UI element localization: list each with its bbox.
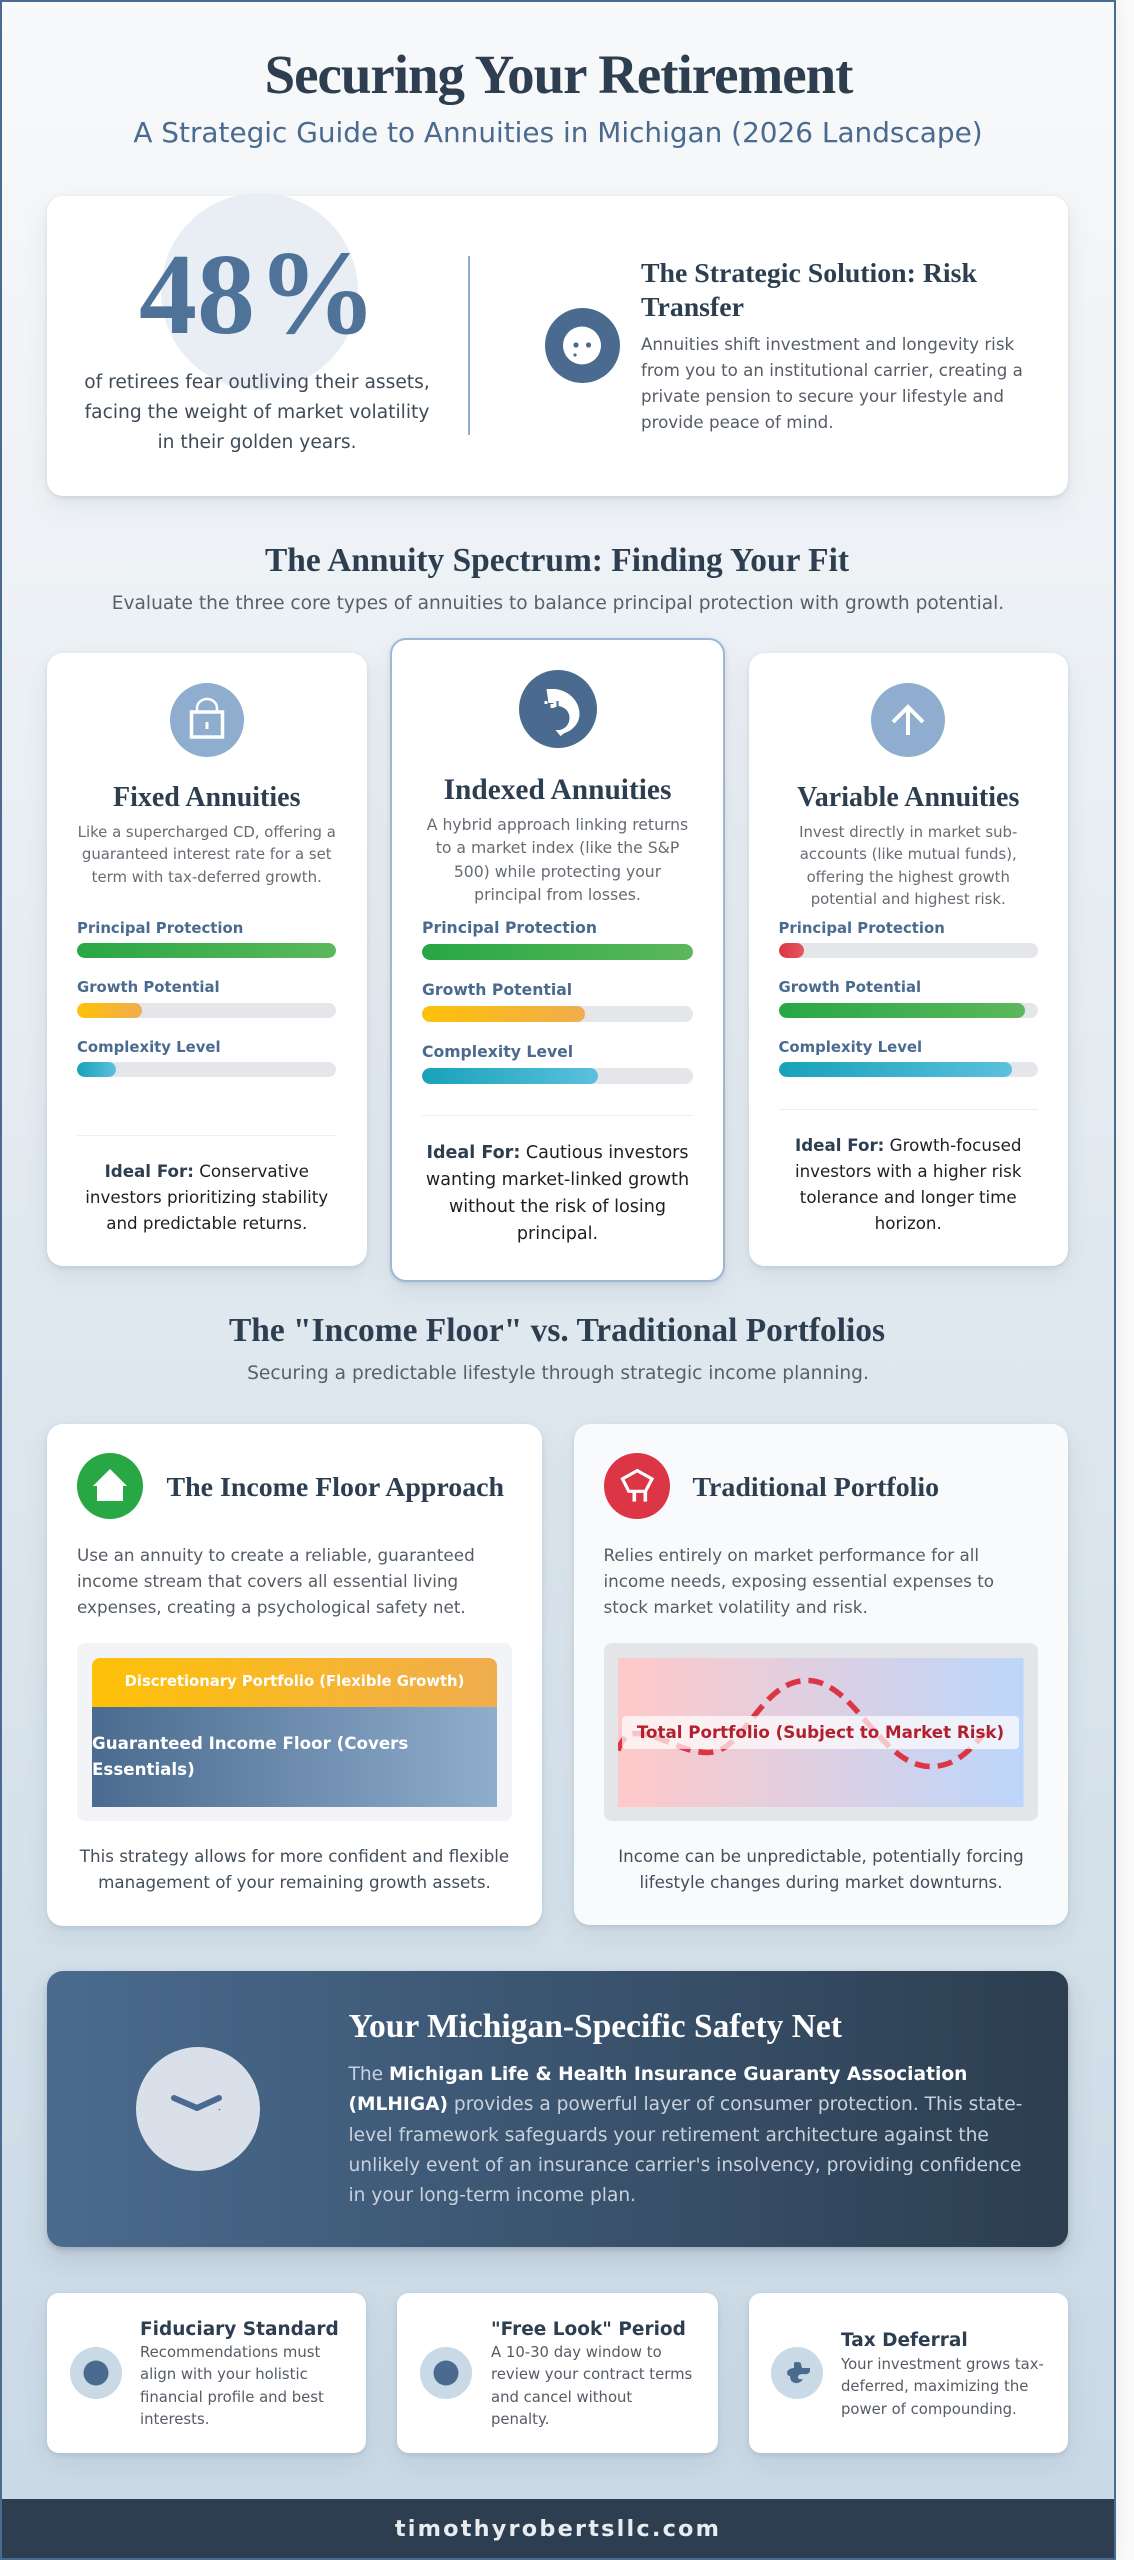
card title: Fiduciary Standard bbox=[140, 2319, 339, 2340]
metric: growth potential: Growth Potential bbox=[778, 978, 921, 996]
card title: Indexed Annuities bbox=[444, 774, 671, 806]
solution text bbox=[641, 334, 1023, 432]
ideal for text: wanting market-linked growth bbox=[426, 1170, 689, 1190]
heading: income floor: The "Income Floor" vs. Traditional Portfolios bbox=[229, 1312, 885, 1349]
metric: complexity level bbox=[77, 1038, 336, 1077]
metric: growth potential bbox=[778, 978, 1038, 1018]
card description: 500) while protecting your bbox=[454, 862, 661, 881]
panel text: level framework safeguards your retirement architecture against the bbox=[348, 2125, 989, 2146]
solution heading: Transfer bbox=[641, 292, 744, 323]
card text: penalty. bbox=[491, 2410, 549, 2428]
diagram: income floor stack bbox=[77, 1643, 512, 1821]
solution text: Annuities shift investment and longevity risk bbox=[641, 334, 1014, 354]
panel text: in your long-term income plan. bbox=[348, 2185, 636, 2206]
solution heading: The Strategic Solution: Risk bbox=[641, 258, 977, 289]
metric: growth potential: Growth Potential bbox=[77, 978, 220, 996]
card text: deferred, maximizing the bbox=[841, 2377, 1028, 2395]
panel: michigan safety net bbox=[47, 1971, 1068, 2247]
segment: guaranteed income floor bbox=[92, 1707, 497, 1807]
statistic caption bbox=[84, 372, 430, 453]
metric: growth potential: Growth Potential bbox=[422, 980, 572, 998]
solution text: provide peace of mind. bbox=[641, 412, 834, 432]
segment: guaranteed income floor: Guaranteed Income Floor (Covers bbox=[92, 1733, 408, 1753]
panel heading: The Income Floor Approach bbox=[166, 1472, 504, 1503]
ideal for text bbox=[426, 1142, 689, 1244]
card description bbox=[799, 823, 1017, 908]
statistic caption: facing the weight of market volatility bbox=[85, 402, 429, 423]
label: total portfolio bbox=[622, 1716, 1019, 1749]
metric: principal protection bbox=[422, 918, 693, 960]
panel note bbox=[618, 1846, 1024, 1892]
panel: fixed annuities bbox=[47, 653, 366, 1266]
ideal for text: principal. bbox=[517, 1224, 598, 1244]
card text bbox=[841, 2355, 1044, 2418]
card text: Recommendations must bbox=[140, 2343, 320, 2361]
panel description: income stream that covers all essential living bbox=[77, 1571, 458, 1591]
panel note: This strategy allows for more confident and flexible bbox=[80, 1846, 509, 1866]
metric: principal protection: Principal Protection bbox=[422, 918, 597, 936]
solution heading bbox=[641, 258, 977, 323]
card text: Your investment grows tax- bbox=[841, 2355, 1044, 2373]
metric: principal protection: Principal Protection bbox=[77, 918, 243, 936]
icon: up arrow bbox=[871, 683, 945, 757]
icon: fiduciary dot bbox=[70, 2347, 122, 2399]
card description: guaranteed interest rate for a set bbox=[82, 845, 332, 863]
panel: variable annuities bbox=[748, 653, 1068, 1266]
panel: statistic and solution bbox=[47, 196, 1068, 496]
panel text: The Michigan Life & Health Insurance Guaranty Association bbox=[348, 2064, 967, 2085]
metric: principal protection: Principal Protection bbox=[778, 918, 945, 936]
icon: shield check bbox=[136, 2047, 260, 2171]
card: tax deferral bbox=[748, 2293, 1068, 2453]
segment: discretionary portfolio bbox=[92, 1658, 497, 1707]
panel note: management of your remaining growth assets. bbox=[98, 1872, 491, 1892]
icon: house bbox=[77, 1453, 143, 1519]
ideal for text: Ideal For: Growth-focused bbox=[795, 1134, 1021, 1154]
metric: complexity level bbox=[422, 1042, 693, 1084]
card text bbox=[140, 2343, 324, 2428]
icon: shield face bbox=[545, 308, 620, 383]
ideal for text bbox=[85, 1161, 328, 1233]
card: free look period bbox=[397, 2293, 718, 2453]
metric: principal protection bbox=[778, 918, 1038, 958]
heading: annuity spectrum: The Annuity Spectrum: Finding Your Fit bbox=[265, 542, 849, 579]
ideal for text: without the risk of losing bbox=[449, 1197, 666, 1217]
card description: A hybrid approach linking returns bbox=[427, 815, 688, 834]
card description: term with tax-deferred growth. bbox=[92, 868, 322, 886]
panel note: Income can be unpredictable, potentially forcing bbox=[618, 1846, 1024, 1866]
ideal for text bbox=[795, 1134, 1022, 1232]
metric: complexity level bbox=[778, 1038, 1038, 1077]
card title: Variable Annuities bbox=[797, 782, 1019, 813]
card text: align with your holistic bbox=[140, 2365, 308, 2383]
panel description: Relies entirely on market performance for all bbox=[604, 1545, 979, 1565]
metric: complexity level: Complexity Level bbox=[422, 1042, 573, 1060]
card text: and cancel without bbox=[491, 2388, 632, 2406]
solution text: private pension to secure your lifestyle and bbox=[641, 386, 1004, 406]
card description: potential and highest risk. bbox=[811, 890, 1006, 908]
footer bbox=[2, 2499, 1114, 2558]
card title: Fixed Annuities bbox=[113, 782, 300, 813]
metric: growth potential bbox=[422, 980, 693, 1022]
card text: financial profile and best bbox=[140, 2388, 324, 2406]
statistic: 48%: 48% bbox=[139, 226, 377, 359]
panel: indexed annuities bbox=[390, 638, 725, 1282]
card text: A 10-30 day window to bbox=[491, 2343, 662, 2361]
ideal for text: investors prioritizing stability bbox=[85, 1187, 328, 1207]
metric: complexity level: Complexity Level bbox=[77, 1038, 221, 1056]
income floor subtitle: Securing a predictable lifestyle through strategic income planning. bbox=[247, 1362, 869, 1384]
ideal for text: Ideal For: Conservative bbox=[105, 1161, 309, 1181]
card description bbox=[78, 823, 336, 886]
spectrum subtitle: Evaluate the three core types of annuities to balance principal protection with growth potential. bbox=[112, 592, 1004, 614]
footer: timothyrobertsllc.com bbox=[395, 2516, 721, 2542]
panel description bbox=[77, 1545, 475, 1617]
card description bbox=[426, 815, 688, 904]
segment: discretionary portfolio: Discretionary Portfolio (Flexible Growth) bbox=[125, 1673, 464, 1690]
panel text bbox=[348, 2064, 1022, 2206]
icon: market risk bbox=[604, 1453, 670, 1519]
card: fiduciary standard bbox=[47, 2293, 366, 2453]
ideal for text: investors with a higher risk bbox=[795, 1160, 1022, 1180]
card description: to a market index (like the S&P bbox=[436, 838, 679, 857]
ideal for text: Ideal For: Cautious investors bbox=[426, 1142, 689, 1162]
ideal for text: and predictable returns. bbox=[106, 1213, 307, 1233]
card title: "Free Look" Period bbox=[491, 2319, 686, 2340]
diagram: total portfolio wave bbox=[604, 1643, 1038, 1821]
panel note: lifestyle changes during market downturns. bbox=[639, 1872, 1003, 1892]
icon: index swirl bbox=[519, 670, 597, 748]
panel text: unlikely event of an insurance carrier's insolvency, providing confidence bbox=[348, 2155, 1021, 2176]
label: total portfolio: Total Portfolio (Subject to Market Risk) bbox=[637, 1722, 1004, 1742]
card description: Invest directly in market sub- bbox=[799, 823, 1017, 841]
icon: tax growth bbox=[771, 2347, 823, 2399]
ideal for text: tolerance and longer time bbox=[800, 1186, 1017, 1206]
segment: guaranteed income floor: Essentials) bbox=[92, 1759, 195, 1779]
statistic caption: of retirees fear outliving their assets, bbox=[84, 372, 430, 393]
card description: offering the highest growth bbox=[807, 868, 1010, 886]
card title: Tax Deferral bbox=[841, 2330, 968, 2351]
metric: growth potential bbox=[77, 978, 336, 1018]
vertical divider bbox=[468, 256, 470, 435]
card text bbox=[491, 2343, 692, 2428]
icon: lock bbox=[170, 683, 244, 757]
subtitle: A Strategic Guide to Annuities in Michigan (2026 Landscape) bbox=[133, 116, 983, 149]
panel heading: Your Michigan-Specific Safety Net bbox=[348, 2008, 842, 2045]
panel note bbox=[80, 1846, 509, 1892]
ideal for text: horizon. bbox=[875, 1212, 942, 1232]
card text: power of compounding. bbox=[841, 2400, 1017, 2418]
statistic caption: in their golden years. bbox=[157, 432, 357, 453]
panel heading: Traditional Portfolio bbox=[692, 1472, 939, 1503]
icon: free look dot bbox=[420, 2347, 472, 2399]
panel text: (MLHIGA) provides a powerful layer of consumer protection. This state- bbox=[348, 2094, 1022, 2115]
card description: Like a supercharged CD, offering a bbox=[78, 823, 336, 841]
panel: traditional portfolio bbox=[574, 1424, 1068, 1925]
panel description: income needs, exposing essential expenses to bbox=[604, 1571, 994, 1591]
title: Securing Your Retirement bbox=[265, 44, 852, 105]
card description: accounts (like mutual funds), bbox=[800, 845, 1017, 863]
decorative circle behind statistic bbox=[161, 193, 358, 390]
metric: principal protection bbox=[77, 918, 336, 958]
chart: market volatility line bbox=[618, 1658, 1024, 1807]
panel: income floor approach bbox=[47, 1424, 542, 1926]
panel description: stock market volatility and risk. bbox=[604, 1597, 868, 1617]
card text: review your contract terms bbox=[491, 2365, 692, 2383]
card text: interests. bbox=[140, 2410, 209, 2428]
solution text: from you to an institutional carrier, creating a bbox=[641, 360, 1023, 380]
card description: principal from losses. bbox=[474, 885, 641, 904]
panel description: expenses, creating a psychological safety net. bbox=[77, 1597, 466, 1617]
metric: complexity level: Complexity Level bbox=[778, 1038, 922, 1056]
panel description: Use an annuity to create a reliable, guaranteed bbox=[77, 1545, 475, 1565]
panel description bbox=[604, 1545, 994, 1617]
